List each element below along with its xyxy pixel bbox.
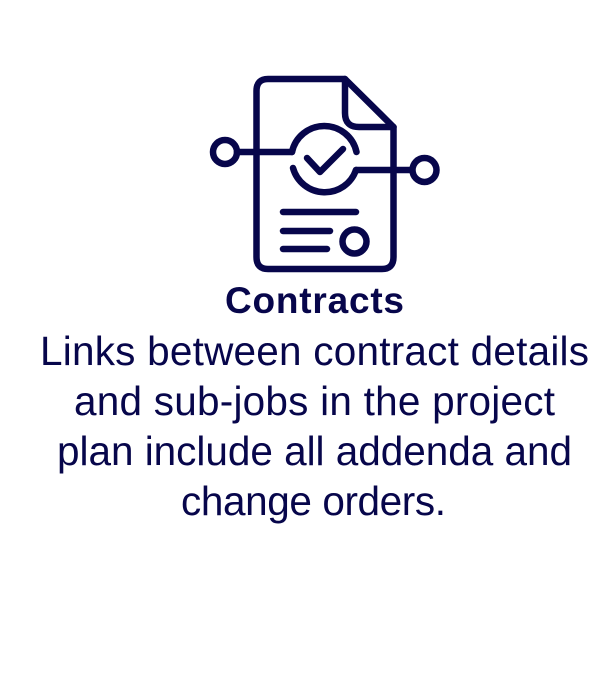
text line two [283,228,330,234]
body line 1: Links between contract details [40,328,589,374]
icon: contract document with check mark [213,79,436,269]
body line 3: plan include all addenda and [57,428,572,474]
heading: Contracts [225,280,404,321]
seal upper arc [292,126,356,152]
folded corner [345,79,394,127]
check mark [307,149,343,172]
text line three [283,246,327,252]
text line one [283,209,356,215]
body line 4: change orders. [181,478,446,524]
right connector node [356,158,436,182]
small seal circle [342,230,366,254]
body text [40,328,589,524]
document outline [256,79,394,269]
left connector node [213,140,292,164]
body line 2: and sub-jobs in the project [74,378,555,424]
seal lower arc [293,168,356,192]
